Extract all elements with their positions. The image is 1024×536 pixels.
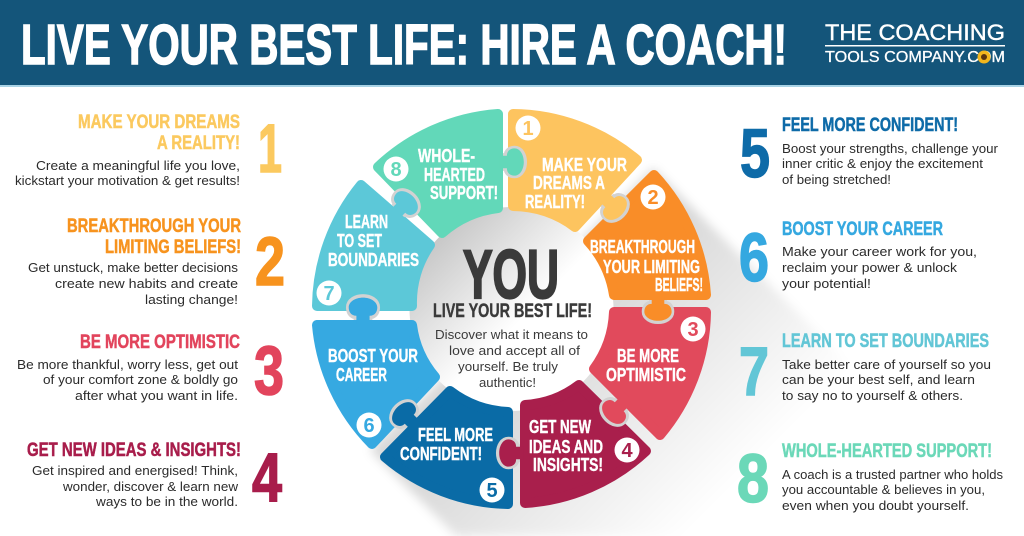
badge 7: 7	[323, 283, 335, 305]
body 8: you accountable & believes in you,	[782, 482, 985, 497]
heading 4: GET NEW IDEAS & INSIGHTS!	[27, 440, 241, 461]
panel: item 2	[28, 216, 285, 307]
logo: The Coaching Tools Company	[825, 20, 1005, 66]
badge 6: 6	[363, 415, 375, 437]
number 4: 4	[252, 439, 282, 516]
wheel label 2	[590, 237, 703, 295]
body 1: Create a meaningful life you love,	[36, 158, 240, 173]
heading 1	[78, 112, 240, 154]
knob: red into maroon	[598, 392, 634, 428]
wheel label 8: HEARTED	[424, 165, 485, 185]
body 3: of your comfort zone & boldly go	[43, 372, 238, 387]
knob: maroon into dark blue	[499, 439, 524, 467]
wheel label 8	[418, 146, 498, 203]
panel: item 7	[739, 331, 991, 410]
wheel label 4: IDEAS AND	[529, 437, 603, 457]
panel: item 1	[15, 110, 282, 188]
panel: item 8	[737, 440, 1003, 517]
long wheel shadow	[370, 168, 1021, 536]
body 3: Be more thankful, worry less, get out	[17, 357, 238, 372]
body 4: wonder, discover & learn new	[62, 479, 239, 494]
badge 2: 2	[647, 187, 659, 209]
wheel label 4	[529, 417, 603, 475]
wheel label 5: CONFIDENT!	[400, 444, 482, 464]
badge 1: 1	[522, 118, 534, 140]
wheel label 6: BOOST YOUR	[328, 346, 418, 366]
badge 3: 3	[687, 319, 699, 341]
wheel label 7: BOUNDARIES	[328, 250, 419, 270]
header banner	[0, 0, 1024, 87]
wheel label 1: DREAMS A	[533, 173, 605, 193]
wheel label 4: INSIGHTS!	[533, 455, 603, 475]
badge 4	[614, 438, 640, 462]
body 8: even when you doubt yourself.	[782, 498, 969, 513]
wheel label 3: OPTIMISTIC	[606, 365, 686, 385]
wheel label 1: MAKE YOUR	[542, 155, 627, 175]
body 7: to say no to yourself & others.	[782, 388, 963, 403]
centre text	[433, 236, 592, 390]
panel: item 6	[739, 219, 977, 296]
piece 3 red	[594, 312, 706, 435]
wheel label 2: BREAKTHROUGH	[590, 237, 695, 257]
body 5: of being stretched!	[782, 172, 891, 187]
centre text: Discover what it means to	[435, 327, 588, 342]
heading 6: BOOST YOUR CAREER	[782, 219, 943, 240]
wheel label 8: SUPPORT!	[430, 183, 498, 203]
body 6: your potential!	[782, 276, 871, 291]
heading 2	[67, 216, 241, 258]
body 4: Get inspired and energised! Think,	[32, 463, 238, 478]
badge 5: 5	[486, 480, 498, 502]
logo: The Coaching Tools Company: TOOLS COMPANY.COM	[825, 49, 1005, 66]
body 6: Make your career work for you,	[782, 244, 977, 259]
wheel label 3: BE MORE	[617, 346, 679, 366]
piece 8 teal	[378, 114, 498, 233]
knob: dark blue into blue	[388, 398, 424, 434]
wheel label 7: LEARN	[345, 212, 388, 232]
number 8: 8	[737, 440, 769, 517]
puzzle wheel	[316, 114, 706, 504]
piece 2 orange	[588, 175, 706, 295]
heading 3: BE MORE OPTIMISTIC	[80, 332, 240, 353]
body 3: after what you want in life.	[75, 388, 238, 403]
number 6: 6	[739, 219, 769, 296]
number 7: 7	[739, 333, 769, 410]
number 3: 3	[254, 332, 284, 409]
badge 1	[516, 116, 540, 140]
wheel label 6: CAREER	[336, 365, 387, 385]
body 2: create new habits and create	[55, 276, 238, 291]
body 3	[17, 357, 238, 403]
heading 1: A REALITY!	[157, 133, 240, 154]
knob: orange into red	[644, 296, 672, 321]
heading 2: BREAKTHROUGH YOUR	[67, 216, 241, 237]
centre disc background	[410, 207, 614, 411]
wheel label 5	[400, 425, 493, 464]
centre text: authentic!	[479, 375, 536, 390]
piece 6 blue	[317, 325, 435, 444]
wheel label 1	[525, 155, 627, 212]
badge 4: 4	[621, 440, 633, 462]
number 2: 2	[255, 223, 285, 300]
body 2	[28, 260, 239, 307]
logo: The Coaching Tools Company: THE COACHING	[825, 20, 1005, 45]
heading 2: LIMITING BELIEFS!	[105, 237, 241, 258]
wheel label 2: BELIEFS!	[655, 275, 703, 295]
badge 7	[316, 280, 342, 306]
centre text: yourself. Be truly	[458, 359, 559, 374]
badge 8	[384, 156, 408, 182]
number 1: 1	[258, 110, 282, 187]
wheel label 7: TO SET	[337, 231, 382, 251]
panel: item 3	[17, 332, 284, 409]
wheel label 5: FEEL MORE	[418, 425, 493, 445]
piece 7 light blue	[317, 185, 430, 306]
wheel label 6	[328, 346, 418, 385]
badge 5	[480, 478, 504, 502]
piece 1 yellow	[513, 114, 637, 227]
heading 5: FEEL MORE CONFIDENT!	[782, 115, 958, 136]
badge 8: 8	[390, 159, 402, 181]
panel: item 4	[27, 439, 282, 516]
wheel label 7	[328, 212, 419, 270]
wheel label 1: REALITY!	[525, 192, 585, 212]
badge 2	[640, 184, 666, 210]
wheel label 8: WHOLE-	[418, 146, 475, 166]
badge 6	[356, 412, 382, 438]
body 7: Take better care of yourself so you	[782, 357, 991, 372]
knob: blue into light blue	[349, 298, 377, 324]
number 5: 5	[740, 115, 770, 192]
body 6: reclaim your power & unlock	[782, 260, 958, 275]
body 1: kickstart your motivation & get results!	[15, 173, 240, 188]
body 4: ways to be in the world.	[95, 494, 238, 509]
piece 4 maroon	[525, 385, 646, 503]
wheel label 4: GET NEW	[529, 417, 591, 437]
body 8: A coach is a trusted partner who holds	[782, 467, 1003, 482]
body 5: inner critic & enjoy the excitement	[782, 156, 983, 171]
heading 1: MAKE YOUR DREAMS	[78, 112, 240, 133]
body 7: can be your best self, and learn	[782, 372, 975, 387]
body 4	[32, 463, 239, 509]
wheel label 2: YOUR LIMITING	[603, 257, 700, 277]
body 5	[782, 141, 999, 187]
centre text: YOU	[463, 236, 559, 313]
centre text: LIVE YOUR BEST LIFE!	[433, 301, 592, 322]
badge 3	[680, 316, 706, 342]
body 2: lasting change!	[145, 292, 238, 307]
body 2: Get unstuck, make better decisions	[28, 260, 239, 275]
panel: item 5	[740, 115, 999, 192]
knob: yellow into orange	[595, 188, 631, 224]
piece 5 dark blue	[385, 391, 508, 504]
knob: light blue into teal	[386, 187, 422, 223]
knob: teal into yellow	[499, 148, 524, 176]
centre text: love and accept all of	[449, 343, 580, 358]
body 7	[782, 357, 991, 403]
body 6	[782, 244, 977, 291]
body 8	[782, 467, 1003, 513]
body 5: Boost your strengths, challenge your	[782, 141, 999, 156]
body 1	[15, 158, 240, 188]
wheel label 3	[606, 346, 686, 385]
